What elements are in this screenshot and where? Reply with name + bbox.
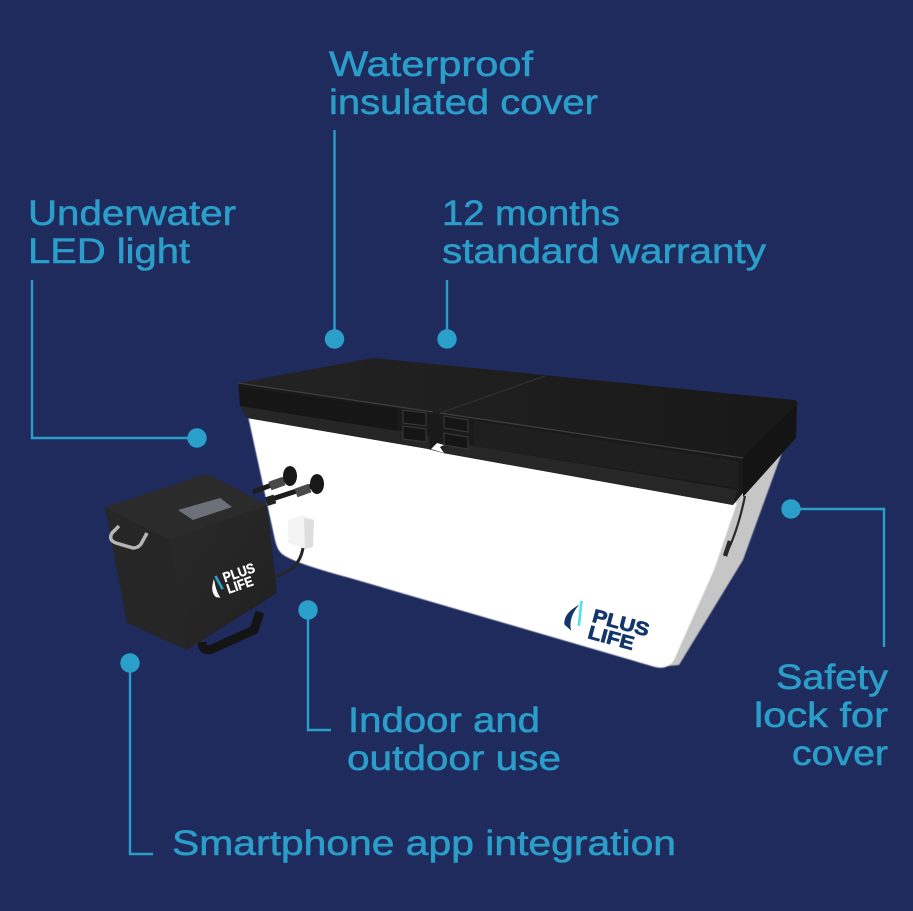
pump top: [105, 475, 267, 539]
pump base handle: [202, 612, 260, 650]
heading: 12 months standard warranty: [442, 194, 767, 271]
heading: indoor and outdoor use: Indoor and: [348, 701, 540, 740]
callout line: safety lock: [781, 499, 884, 647]
cover edge highlight: [238, 383, 743, 458]
heading: safety lock for cover: Safety: [776, 658, 889, 697]
heading: underwater LED light: [28, 194, 236, 271]
cable: [275, 548, 303, 577]
underwater LED fittings: [253, 466, 324, 506]
pump logo text: PLUS: [221, 559, 257, 585]
callout line: LED light: [32, 280, 207, 448]
heading: indoor and outdoor use: [347, 701, 561, 778]
cover seam: [443, 376, 545, 412]
cover side panels: [239, 387, 398, 431]
pump logo: LIFE: [224, 573, 255, 597]
connector box on tub: [288, 515, 314, 549]
pump screen: [178, 498, 232, 520]
cover lip right: [443, 441, 737, 505]
cover handle panels: [403, 410, 468, 449]
cover right end: [743, 404, 797, 497]
pump logo drop: [209, 579, 220, 600]
cover top: [238, 358, 797, 458]
tub front face: [248, 416, 737, 668]
pump unit: [105, 475, 277, 650]
cover lip left: [240, 405, 430, 449]
pump handle: [111, 526, 147, 548]
callout line: smartphone app: [120, 653, 153, 854]
heading: safety lock for cover: [754, 658, 889, 773]
tub body: [248, 416, 783, 668]
callout line: waterproof cover: [325, 130, 344, 349]
cover hinge notch: [431, 443, 444, 453]
logo streak: [578, 601, 583, 626]
logo drop: [562, 602, 579, 631]
pump logo: [207, 559, 261, 601]
insulated cover: [238, 358, 797, 505]
pump front: [170, 505, 277, 650]
heading: underwater LED light: LED light: [28, 232, 190, 271]
heading: indoor and outdoor use: outdoor use: [347, 739, 561, 778]
pump side: [105, 507, 187, 650]
heading: smartphone app integration: Smartphone app integration: [172, 824, 676, 863]
cover dark backing: [238, 383, 743, 505]
tub logo: [560, 598, 652, 658]
heading: underwater LED light: Underwater: [28, 194, 236, 233]
heading: safety lock for cover: cover: [792, 734, 888, 773]
heading: safety lock for cover: lock for: [754, 696, 888, 735]
logo text: PLUS: [590, 606, 651, 641]
heading: waterproof insulated cover: [329, 45, 598, 122]
heading: 12 months standard warranty: 12 months: [442, 194, 620, 233]
tub right side face: [668, 450, 783, 666]
safety strap: [729, 496, 745, 548]
callout line: indoor and outdoor: [298, 600, 331, 730]
heading: waterproof insulated cover: Waterproof: [329, 45, 533, 84]
heading: waterproof insulated cover: insulated cover: [329, 83, 598, 122]
heading: 12 months standard warranty: standard warranty: [442, 232, 767, 271]
callout line: warranty: [437, 280, 457, 349]
tub logo: LIFE: [586, 622, 636, 655]
